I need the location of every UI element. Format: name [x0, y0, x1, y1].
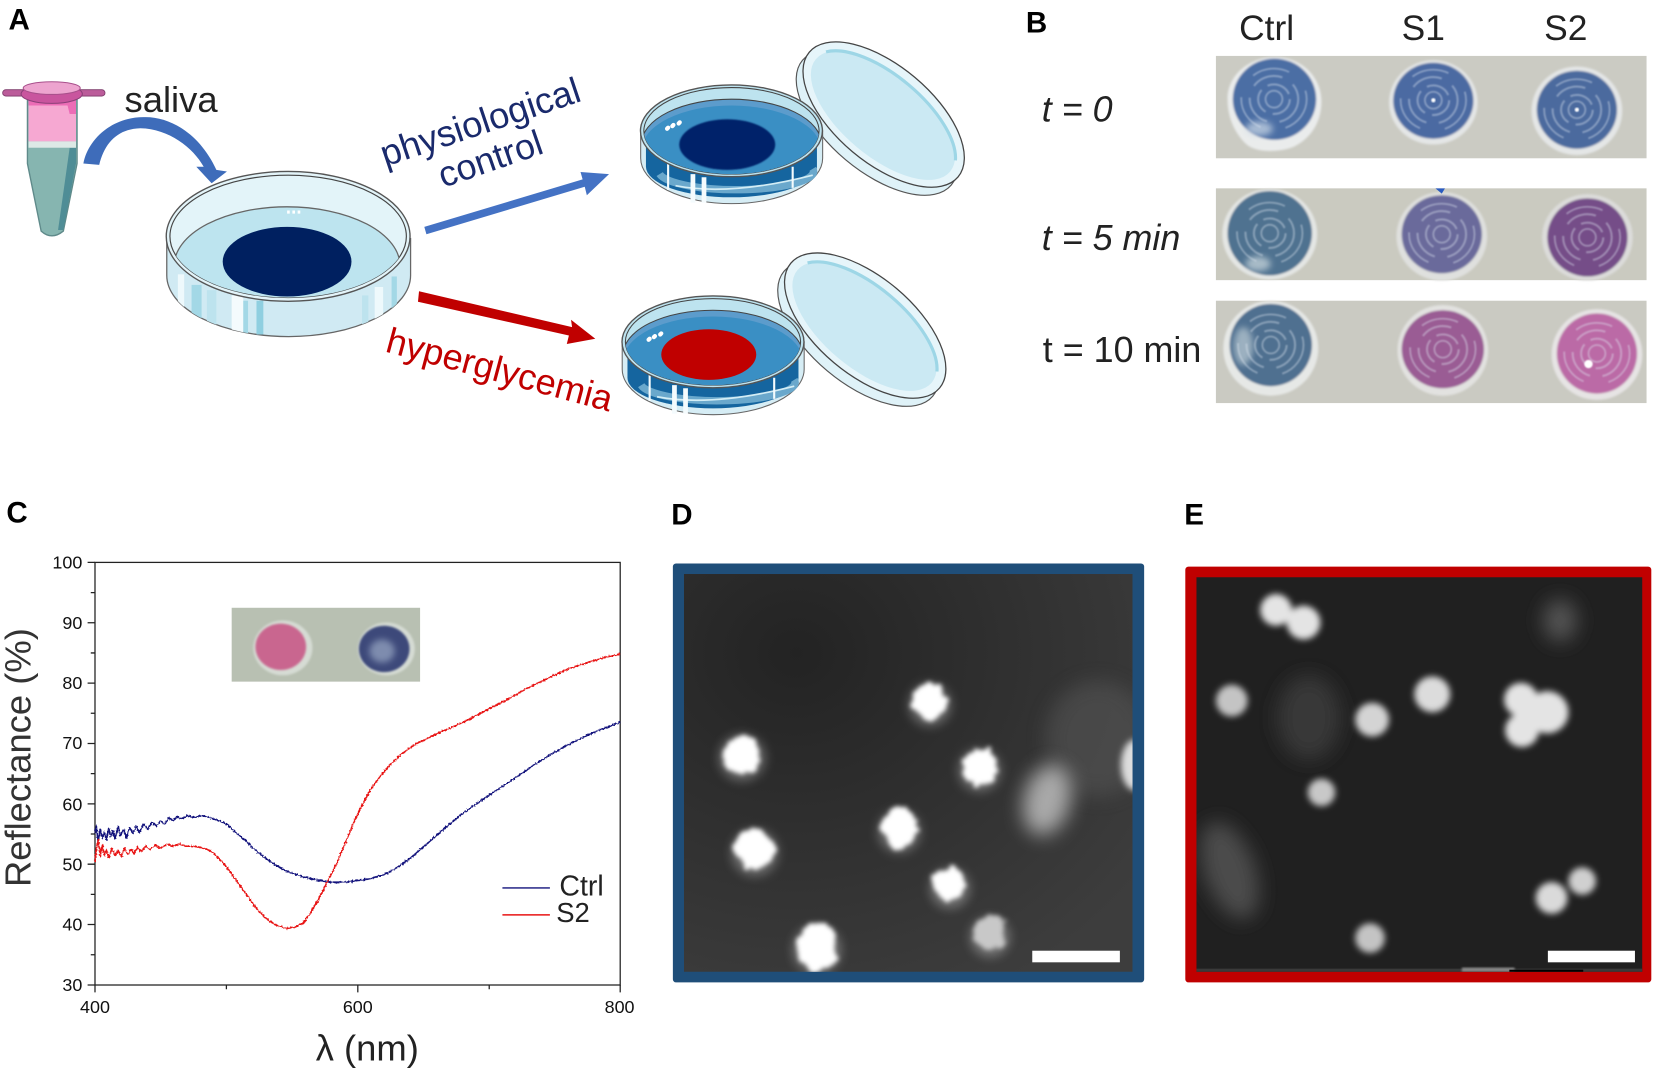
y tick labels: 50	[62, 855, 82, 875]
dish base	[641, 131, 823, 204]
panel C: reflectance chart	[0, 496, 635, 1068]
photo: t = 0	[1216, 56, 1647, 158]
sensor disc: dark blue	[223, 227, 351, 297]
y tick labels: 90	[62, 613, 82, 633]
row labels: t = 0	[1042, 89, 1113, 129]
arrow: to physiological control	[424, 172, 609, 234]
y tick labels: 70	[62, 733, 82, 753]
image frame	[1185, 567, 1651, 982]
heading: C: C	[6, 496, 28, 529]
micrograph	[684, 574, 1150, 974]
column labels: Ctrl	[1239, 9, 1294, 48]
column labels: S2	[1544, 9, 1587, 48]
sensor disc: blue	[679, 119, 775, 170]
x tick labels: 800	[605, 997, 635, 1017]
row labels: t = 5 min	[1042, 218, 1180, 258]
photo: t = 5 min	[1216, 188, 1647, 281]
y tick labels: 100	[52, 553, 82, 573]
panel B: colorimetric time series	[1026, 7, 1647, 403]
column labels	[1239, 9, 1587, 48]
label: saliva: saliva	[125, 79, 218, 120]
sensor disc: red	[661, 329, 756, 380]
chart axes	[52, 553, 635, 1017]
panel E: micrograph hyperglycemia	[1184, 498, 1651, 982]
x axis title: λ (nm)	[316, 1027, 419, 1068]
panel A: saliva assay schematic	[3, 4, 989, 433]
label: hyperglycemia: hyperglycemia	[382, 320, 618, 420]
x tick labels: 400	[80, 997, 110, 1017]
column labels: S1	[1402, 9, 1445, 48]
arrow: saliva to dish	[83, 117, 227, 183]
heading: E: E	[1184, 498, 1204, 531]
image frame	[673, 563, 1144, 982]
label: physiological control: physiological	[375, 69, 585, 174]
arrow: to hyperglycemia	[418, 291, 595, 344]
curve: Ctrl	[95, 722, 620, 882]
icon: sample tube	[3, 82, 105, 236]
scale bar	[1032, 951, 1120, 962]
icon: central Petri dish	[166, 171, 411, 338]
heading: D: D	[671, 498, 693, 531]
x tick labels	[80, 997, 635, 1017]
legend	[502, 870, 604, 928]
y tick labels: 40	[62, 915, 82, 935]
photo: t = 10 min	[1216, 301, 1647, 403]
scale bar	[1548, 951, 1635, 962]
legend: Ctrl	[559, 870, 604, 902]
heading: A: A	[8, 4, 30, 37]
row labels	[1042, 89, 1201, 370]
icon: hyperglycemia dish with lid	[621, 252, 946, 416]
row labels: t = 10 min	[1043, 330, 1201, 370]
y tick labels: 60	[62, 794, 82, 814]
heading: B: B	[1026, 7, 1047, 40]
icon: control dish with lid	[640, 41, 965, 204]
curve: S2	[95, 654, 620, 929]
photo inset: S2 and control discs	[232, 608, 420, 682]
label: physiological control: control	[433, 123, 548, 195]
legend: S2	[556, 897, 590, 928]
dish lid	[753, 226, 971, 433]
dish base	[622, 342, 804, 415]
y tick labels	[52, 553, 82, 995]
dish lid	[771, 15, 989, 222]
micrograph	[1189, 577, 1642, 972]
panel D: micrograph control	[671, 498, 1150, 982]
x tick labels: 600	[343, 997, 373, 1017]
y tick labels: 80	[62, 673, 82, 693]
y tick labels: 30	[62, 975, 82, 995]
